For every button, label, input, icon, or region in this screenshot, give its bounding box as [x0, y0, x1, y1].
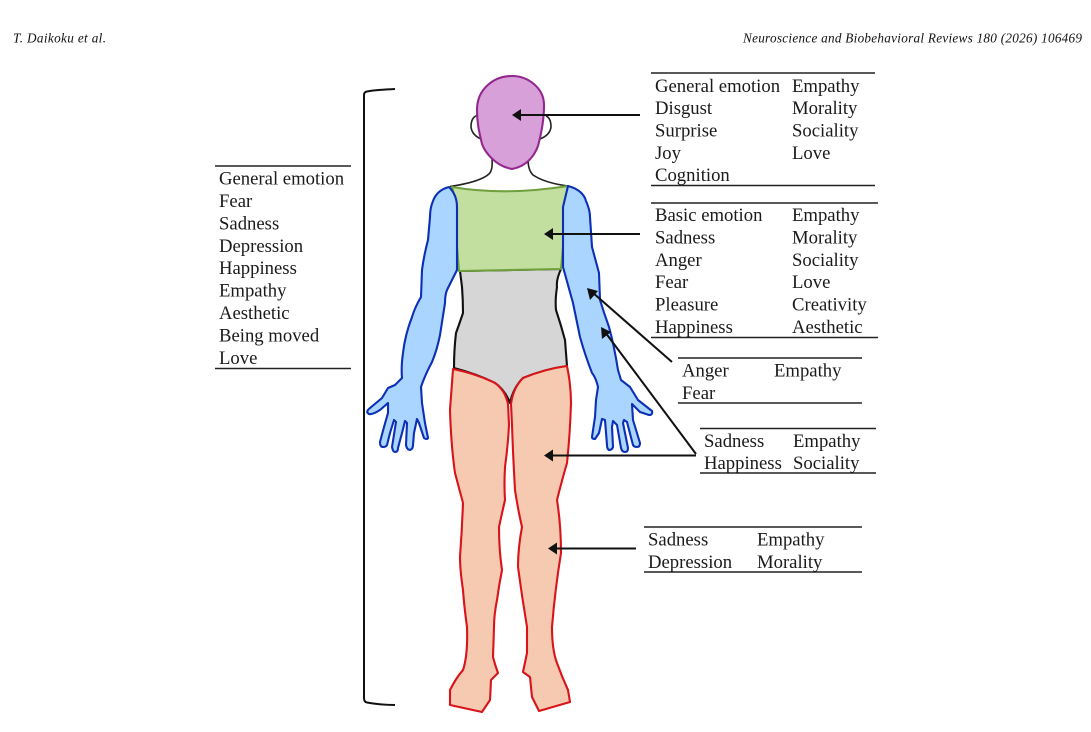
panel: forearm and thigh emotions list: Empathy — [793, 431, 861, 452]
panel: lower leg emotions list: Empathy — [757, 530, 825, 550]
panel: head emotions list: Disgust — [655, 98, 713, 119]
head — [477, 76, 544, 169]
panel: whole-body emotions list: Aesthetic — [219, 303, 290, 324]
panel: chest emotions list: Sociality — [792, 250, 859, 271]
panel: whole-body emotions list: Being moved — [219, 325, 320, 346]
panel: upper arm emotions list — [678, 358, 862, 404]
panel: head emotions list: Cognition — [655, 165, 730, 186]
panel: forearm and thigh emotions list: Sociality — [793, 453, 860, 474]
panel: lower leg emotions list: Morality — [757, 552, 823, 573]
panel: chest emotions list: Love — [792, 272, 830, 293]
panel: head emotions list: Surprise — [655, 120, 717, 142]
panel: lower leg emotions list: Sadness — [648, 530, 708, 550]
panel: lower leg emotions list: Depression — [648, 552, 733, 573]
running header: author: T. Daikoku et al. — [13, 30, 106, 46]
panel: head emotions list: Empathy — [792, 76, 860, 97]
arrow: head — [512, 109, 640, 121]
torso: abdomen — [454, 269, 567, 403]
panel: chest emotions list: Aesthetic — [792, 317, 863, 338]
panel: whole-body emotions list: General emotion — [219, 168, 345, 190]
panel: head emotions list: General emotion — [655, 76, 781, 97]
arrow: forearm — [601, 327, 696, 454]
whole-body bracket — [364, 89, 395, 705]
running header: journal citation: Neuroscience and Biobehavioral Reviews 180 (2026) 106469 — [742, 30, 1082, 46]
panel: whole-body emotions list: Depression — [219, 236, 304, 257]
panel: chest emotions list: Happiness — [655, 317, 733, 338]
panel: chest emotions list: Morality — [792, 228, 858, 248]
left arm and hand — [367, 187, 457, 452]
panel: forearm and thigh emotions list: Sadness — [704, 431, 764, 452]
panel: head emotions list: Morality — [792, 98, 858, 119]
panel: chest emotions list: Sadness — [655, 228, 715, 248]
panel: whole-body emotions list: Happiness — [219, 258, 297, 279]
panel: whole-body emotions list: Love — [219, 348, 257, 369]
panel: head emotions list: Love — [792, 143, 830, 164]
panel: upper arm emotions list: Anger — [682, 360, 729, 382]
panel: chest emotions list: Creativity — [792, 294, 867, 316]
panel: chest emotions list: Empathy — [792, 205, 860, 226]
panel: lower leg emotions list — [644, 527, 862, 573]
right arm and hand — [563, 186, 652, 452]
panel: whole-body emotions list: Sadness — [219, 213, 279, 234]
panel: whole-body emotions list: Empathy — [219, 281, 287, 302]
right leg and foot — [511, 366, 571, 711]
panel: head emotions list: Sociality — [792, 120, 859, 142]
arrow: chest — [544, 228, 640, 240]
arrow: thigh — [544, 450, 696, 462]
panel: whole-body emotions list — [215, 166, 351, 369]
arrow: lower leg — [548, 542, 636, 554]
body figure — [367, 76, 652, 712]
panel: whole-body emotions list: Fear — [219, 191, 253, 212]
arrow: upper arm — [587, 288, 672, 362]
panel: chest emotions list: Anger — [655, 250, 702, 271]
panel: upper arm emotions list: Fear — [682, 383, 716, 404]
panel: forearm and thigh emotions list — [700, 428, 876, 474]
panel: chest emotions list: Basic emotion — [655, 205, 763, 226]
panel: head emotions list: Joy — [655, 143, 682, 164]
panel: upper arm emotions list: Empathy — [774, 360, 842, 382]
torso: chest — [452, 186, 568, 271]
panel: chest emotions list: Pleasure — [655, 294, 718, 316]
left leg and foot — [450, 369, 509, 712]
panel: chest emotions list: Fear — [655, 272, 689, 293]
panel: forearm and thigh emotions list: Happiness — [704, 453, 782, 474]
ears and neck outline — [450, 115, 568, 186]
panel: head emotions list — [651, 73, 875, 186]
panel: chest emotions list — [651, 203, 878, 338]
